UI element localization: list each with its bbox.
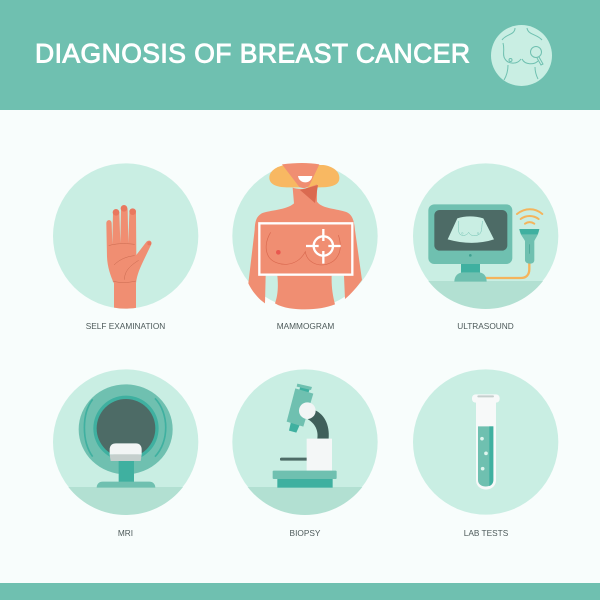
- icon: breast self-check badge: [491, 25, 552, 86]
- panel: biopsy: [232, 369, 378, 515]
- label: SELF EXAMINATION: [86, 321, 165, 331]
- label: BIOPSY: [290, 528, 321, 538]
- icon: microscope: [273, 384, 337, 488]
- icon: probe: [519, 229, 539, 264]
- footer band: [0, 583, 600, 600]
- background circle: [53, 369, 198, 515]
- ground: [248, 487, 362, 515]
- background circle: [413, 369, 558, 515]
- background circle: [232, 369, 378, 515]
- panel: MRI: [53, 369, 198, 515]
- icon: monitor: [428, 204, 512, 282]
- label: LAB TESTS: [464, 528, 509, 538]
- panel: ultrasound: [413, 163, 558, 309]
- background circle: [232, 163, 378, 309]
- icon: signal waves: [517, 209, 542, 224]
- ground: [428, 281, 543, 309]
- header band: [0, 0, 600, 110]
- label: ULTRASOUND: [457, 321, 514, 331]
- icon: woman torso: [248, 163, 362, 309]
- panel: mammogram: [232, 163, 378, 309]
- label: MRI: [118, 528, 133, 538]
- background circle: [413, 163, 558, 309]
- title: DIAGNOSIS OF BREAST CANCER: [35, 38, 470, 68]
- ground: [68, 487, 183, 515]
- icon: test tube: [472, 394, 500, 489]
- panel: self examination: [53, 163, 198, 312]
- icon: scanner: [79, 384, 173, 488]
- icon: hand: [106, 205, 151, 312]
- panel: lab tests: [413, 369, 558, 515]
- background circle: [53, 163, 198, 309]
- cable: [485, 262, 529, 278]
- label: MAMMOGRAM: [277, 321, 334, 331]
